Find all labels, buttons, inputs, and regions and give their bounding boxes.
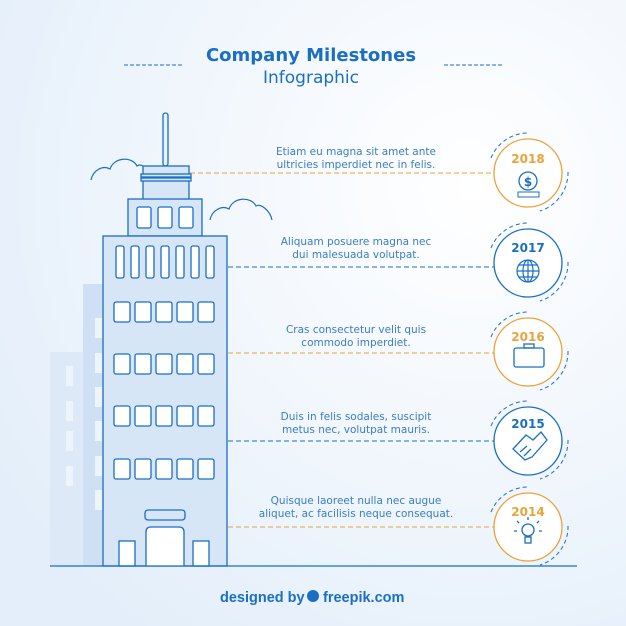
milestone 2014: 2014 — [511, 505, 545, 519]
footer credit — [220, 590, 404, 606]
footer credit: freepik.com — [323, 590, 404, 606]
milestone 2017: dui malesuada volutpat. — [292, 249, 420, 261]
milestone 2018: 2018 — [511, 152, 545, 166]
milestone 2016 — [228, 312, 568, 390]
title: Infographic — [263, 68, 359, 88]
milestone 2014 — [228, 487, 568, 565]
main building — [103, 113, 227, 566]
milestone 2017: 2017 — [511, 241, 545, 255]
clouds — [91, 159, 272, 220]
background buildings — [50, 284, 105, 566]
milestone 2015: 2015 — [511, 417, 545, 431]
milestone 2015 — [228, 401, 568, 479]
footer credit: designed by — [220, 590, 305, 606]
milestone 2015: metus nec, volutpat mauris. — [282, 424, 430, 436]
milestone 2016: 2016 — [511, 330, 545, 344]
milestone 2018 — [190, 133, 568, 211]
title — [124, 45, 504, 88]
milestone 2017 — [228, 223, 568, 301]
milestone 2018: Etiam eu magna sit amet ante — [276, 146, 436, 158]
milestone 2018: ultricies imperdiet nec in felis. — [277, 159, 435, 171]
milestone 2015: Duis in felis sodales, suscipit — [281, 411, 431, 423]
ground line — [50, 565, 577, 567]
milestone 2018: $ — [524, 175, 532, 189]
title: Company Milestones — [206, 45, 416, 66]
milestone 2016: Cras consectetur velit quis — [286, 324, 426, 336]
milestone 2017: Aliquam posuere magna nec — [281, 236, 431, 248]
milestone 2014: Quisque laoreet nulla nec augue — [271, 495, 441, 507]
milestone 2014: aliquet, ac facilisis neque consequat. — [259, 508, 453, 520]
milestone 2016: commodo imperdiet. — [301, 337, 411, 349]
